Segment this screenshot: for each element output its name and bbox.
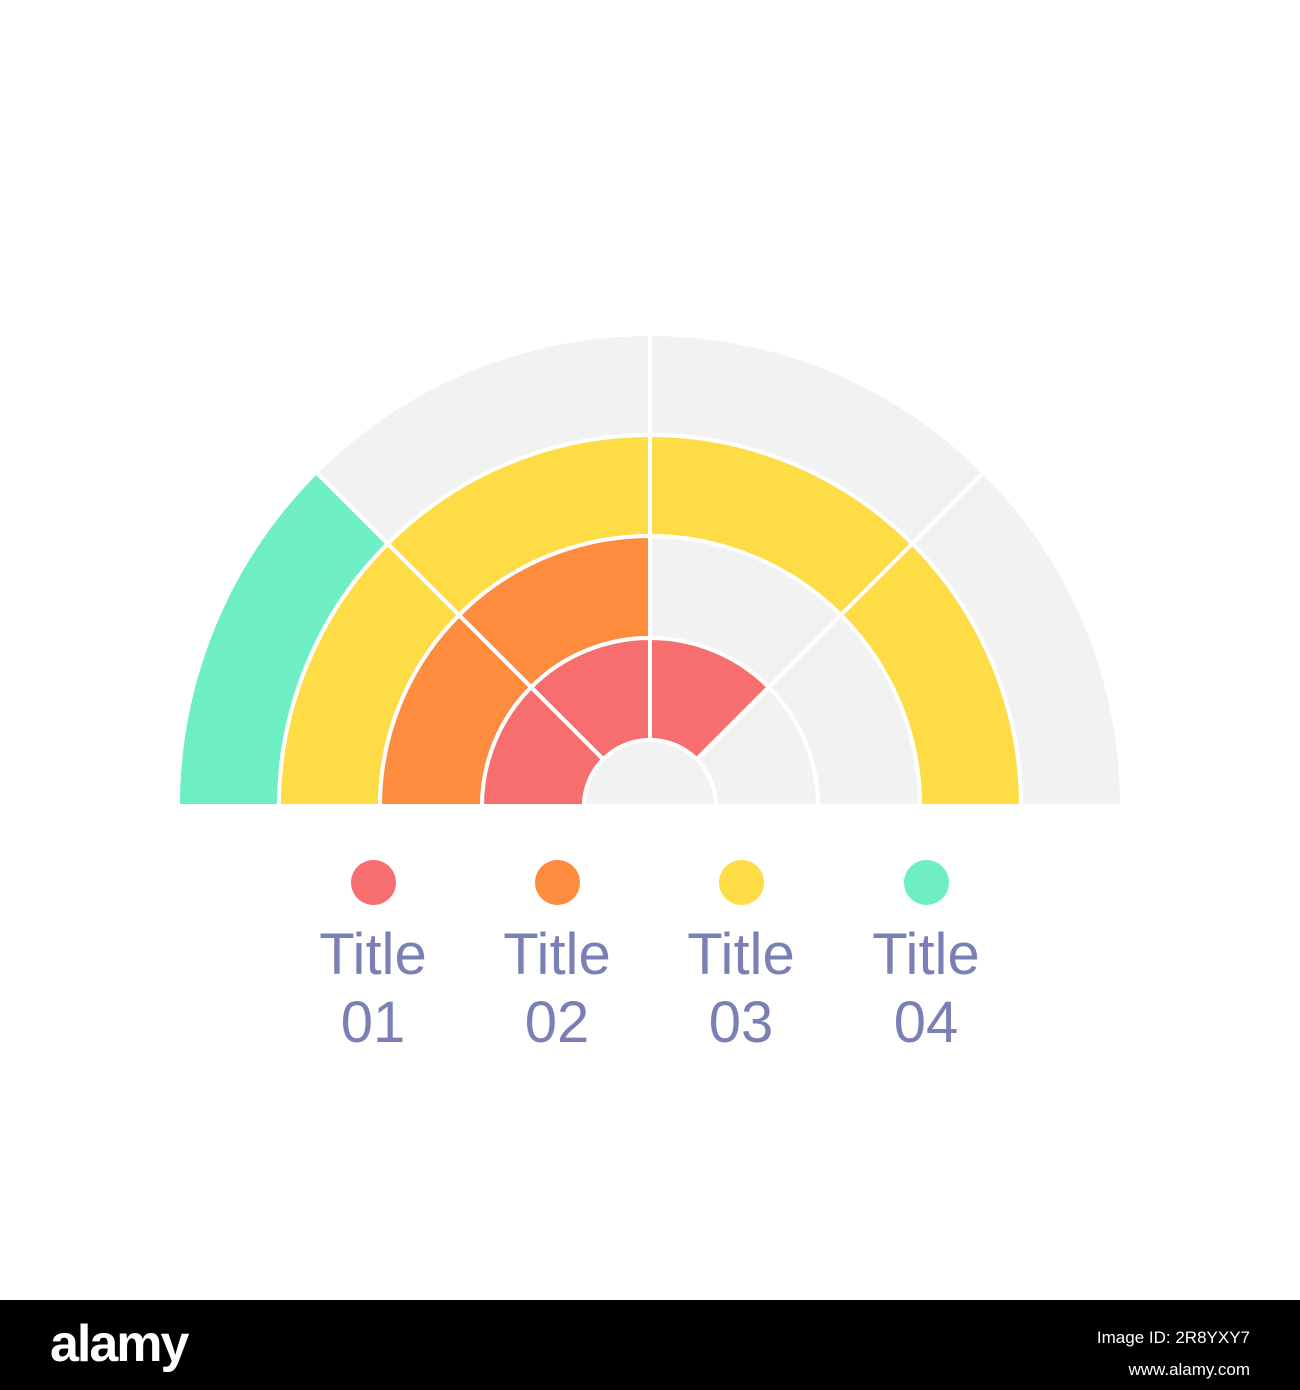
legend <box>319 860 980 1055</box>
logo: alamy <box>50 1315 187 1373</box>
legend item 02: Title <box>503 922 611 987</box>
ring: third <box>380 536 920 806</box>
legend item 04: 04 <box>894 990 958 1055</box>
legend item 02 <box>503 860 611 1055</box>
legend item 03: Title <box>687 922 795 987</box>
legend item 01 <box>319 860 427 1055</box>
legend item 04: Title <box>872 922 980 987</box>
ring: inner <box>482 638 818 806</box>
image id: www.alamy.com <box>1128 1360 1250 1379</box>
legend item 01: 01 <box>341 990 405 1055</box>
image id: Image ID: 2R8YXY7 <box>1097 1328 1250 1347</box>
image id <box>1097 1328 1250 1379</box>
ring: outer <box>178 334 1122 806</box>
legend item 03: 03 <box>709 990 773 1055</box>
legend item 03 <box>687 860 795 1055</box>
legend item 02: 02 <box>525 990 589 1055</box>
ring: second <box>279 435 1021 806</box>
center disk <box>584 740 716 806</box>
footer bar <box>0 1300 1300 1390</box>
legend item 04 <box>872 860 980 1055</box>
legend item 01: Title <box>319 922 427 987</box>
